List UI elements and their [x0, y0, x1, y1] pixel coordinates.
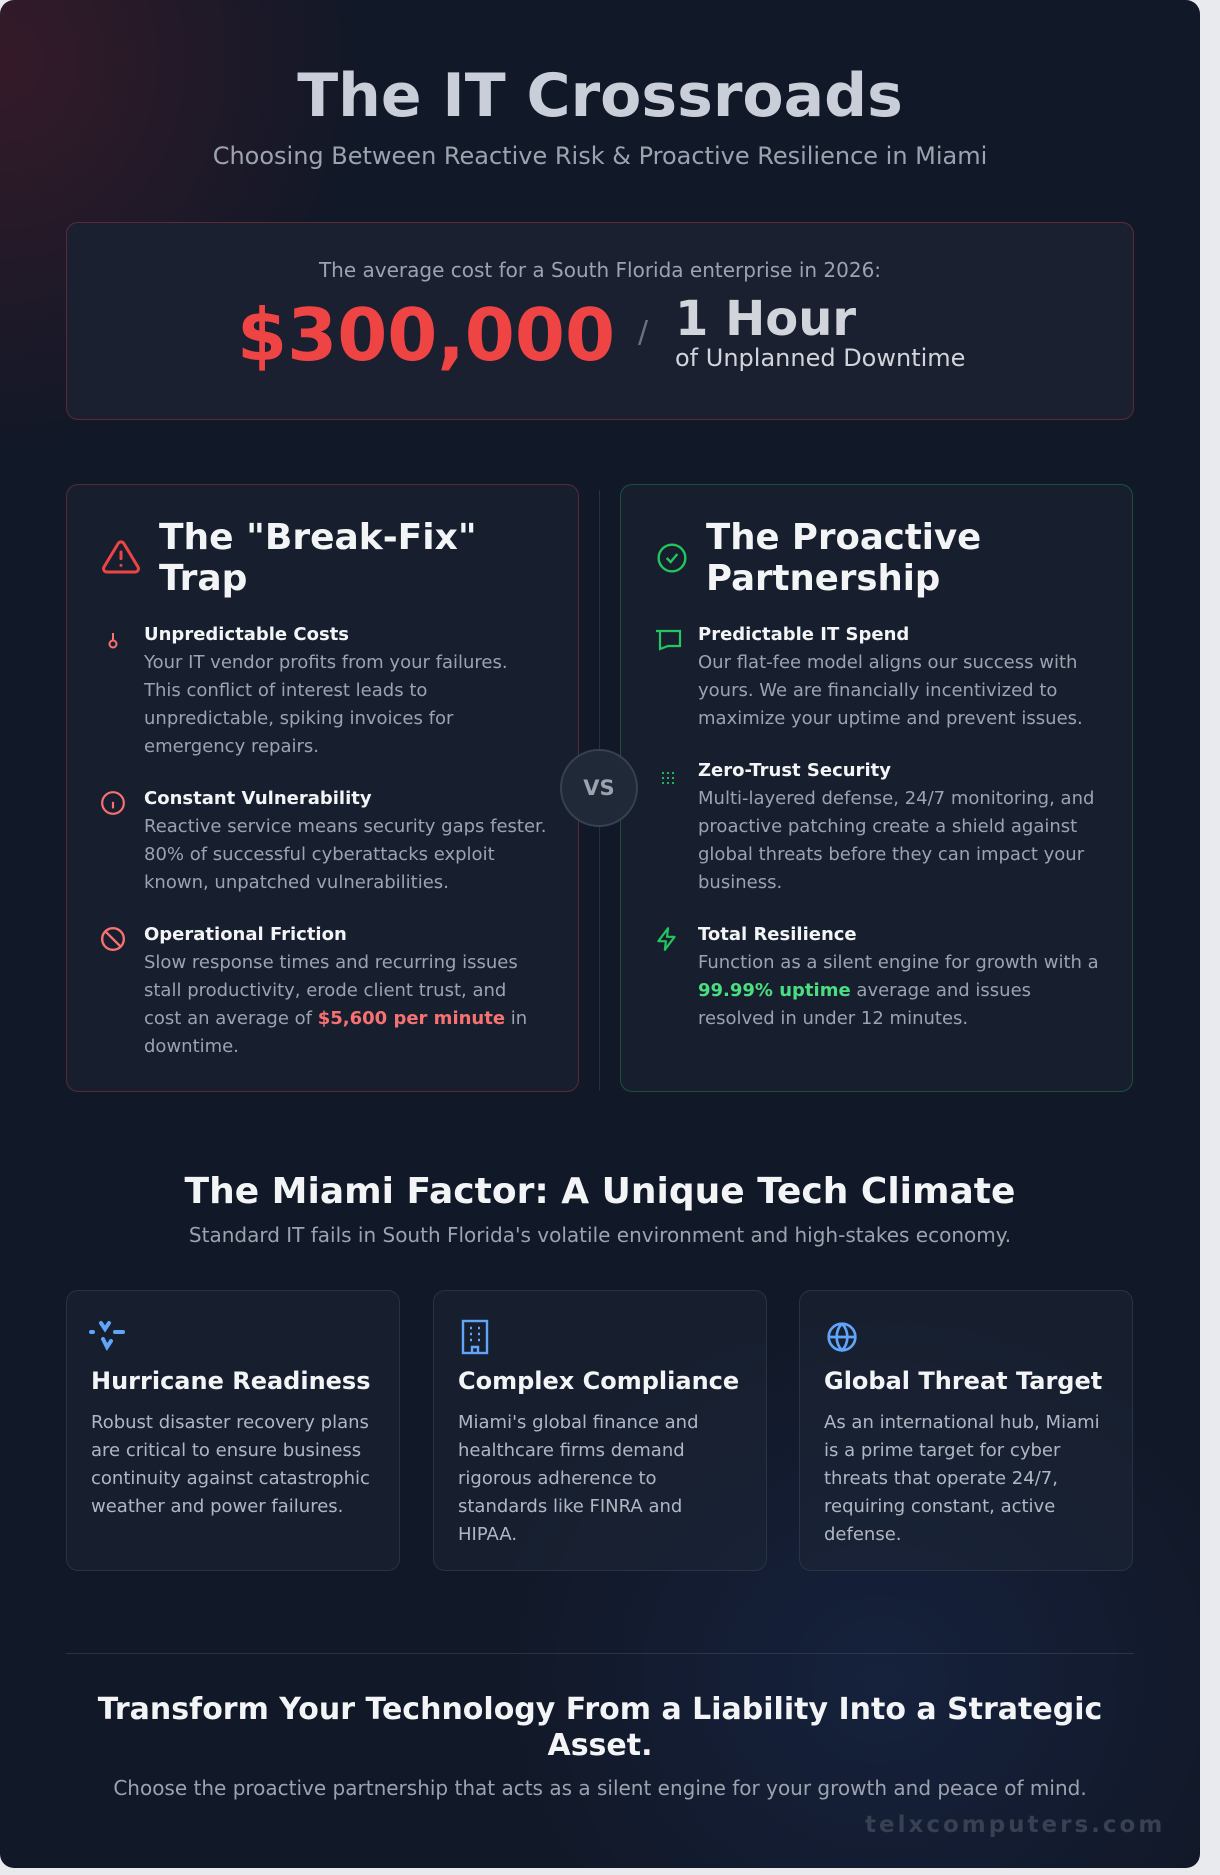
- 1 hour: 1 Hour: [675, 291, 856, 347]
- item: vulnerability: Reactive service means security gaps fester. 80% of successful cyberattacks exploit known, unpatched vulnerabilities.: [144, 816, 547, 893]
- icon: ban: [101, 927, 125, 951]
- text: As an international hub, Miami is a prime target for cyber threats that operate 24/7, requiring constant, active defense.: [824, 1412, 1100, 1545]
- item: resilience: Function as a silent engine for growth with a 99.99% uptime average and issues resolved in under 12 minutes.: [698, 952, 1099, 1029]
- text: Miami's global finance and healthcare firms demand rigorous adherence to standards like FINRA and HIPAA.: [458, 1412, 699, 1545]
- miami subtitle: Standard IT fails in South Florida's volatile environment and high-stakes economy.: [189, 1223, 1011, 1247]
- item: friction: Operational Friction: [144, 924, 347, 945]
- text: Robust disaster recovery plans are critical to ensure business continuity against catastrophic weather and power failures.: [91, 1412, 370, 1517]
- item: resilience: Total Resilience: [698, 924, 857, 945]
- heading: [159, 517, 477, 599]
- item: zero trust: Zero-Trust Security: [698, 760, 891, 781]
- title: Hurricane Readiness: [91, 1367, 371, 1395]
- panel: break-fix: [66, 484, 579, 1092]
- icon: thermometer: [108, 633, 118, 648]
- item: zero trust: Multi-layered defense, 24/7 monitoring, and proactive patching create a shield against global threats before they can impact your business.: [698, 788, 1094, 893]
- stat box: [66, 222, 1134, 420]
- item: vulnerability: Constant Vulnerability: [144, 788, 372, 809]
- icon: globe: [827, 1322, 857, 1352]
- icon: check: [658, 544, 686, 572]
- heading: The Proactive: [706, 517, 981, 558]
- icon: screen: [656, 630, 682, 650]
- item: spend: Predictable IT Spend: [698, 624, 909, 645]
- title: Complex Compliance: [458, 1367, 739, 1395]
- item: spend: Our flat-fee model aligns our success with yours. We are financially incentivized to maximize your uptime and prevent issues.: [698, 652, 1083, 729]
- stat caption: The average cost for a South Florida enterprise in 2026:: [319, 258, 881, 282]
- closing heading: Transform Your Technology From a Liability Into a Strategic Asset.: [98, 1692, 1102, 1763]
- icon: grid: [662, 772, 674, 784]
- item: costs: Your IT vendor profits from your failures. This conflict of interest leads to unpredictable, spiking invoices for emergency repairs.: [144, 652, 508, 757]
- slash: /: [638, 315, 648, 350]
- icon: info: [101, 791, 125, 815]
- title: The IT Crossroads: [297, 61, 903, 131]
- title: Global Threat Target: [824, 1367, 1102, 1395]
- card: global: [799, 1290, 1133, 1571]
- heading: Trap: [159, 558, 247, 599]
- card: hurricane: [66, 1290, 400, 1571]
- subtitle: Choosing Between Reactive Risk & Proactive Resilience in Miami: [213, 142, 987, 170]
- card: compliance: [433, 1290, 767, 1571]
- panel: proactive: [620, 484, 1133, 1092]
- icon: warning: [102, 540, 140, 574]
- vs badge: [560, 749, 638, 827]
- vs badge: VS: [583, 776, 615, 800]
- item: friction: Slow response times and recurring issues stall productivity, erode client trust, and cost an average of $5,600 per minute in downtime.: [144, 952, 527, 1057]
- icon: hurricane: [89, 1320, 125, 1351]
- icon: bolt: [657, 927, 676, 951]
- heading: Partnership: [706, 558, 940, 599]
- heading: [706, 517, 981, 599]
- closing text: Choose the proactive partnership that acts as a silent engine for your growth and peace of mind.: [113, 1776, 1087, 1800]
- icon: building: [462, 1320, 488, 1354]
- downtime label: of Unplanned Downtime: [675, 344, 965, 372]
- item: costs: Unpredictable Costs: [144, 624, 349, 645]
- vs line: [599, 490, 600, 1090]
- watermark: telxcomputers.com: [865, 1812, 1165, 1838]
- miami heading: The Miami Factor: A Unique Tech Climate: [185, 1171, 1015, 1212]
- big number: $300,000: [237, 293, 615, 377]
- heading: The "Break-Fix": [159, 517, 477, 558]
